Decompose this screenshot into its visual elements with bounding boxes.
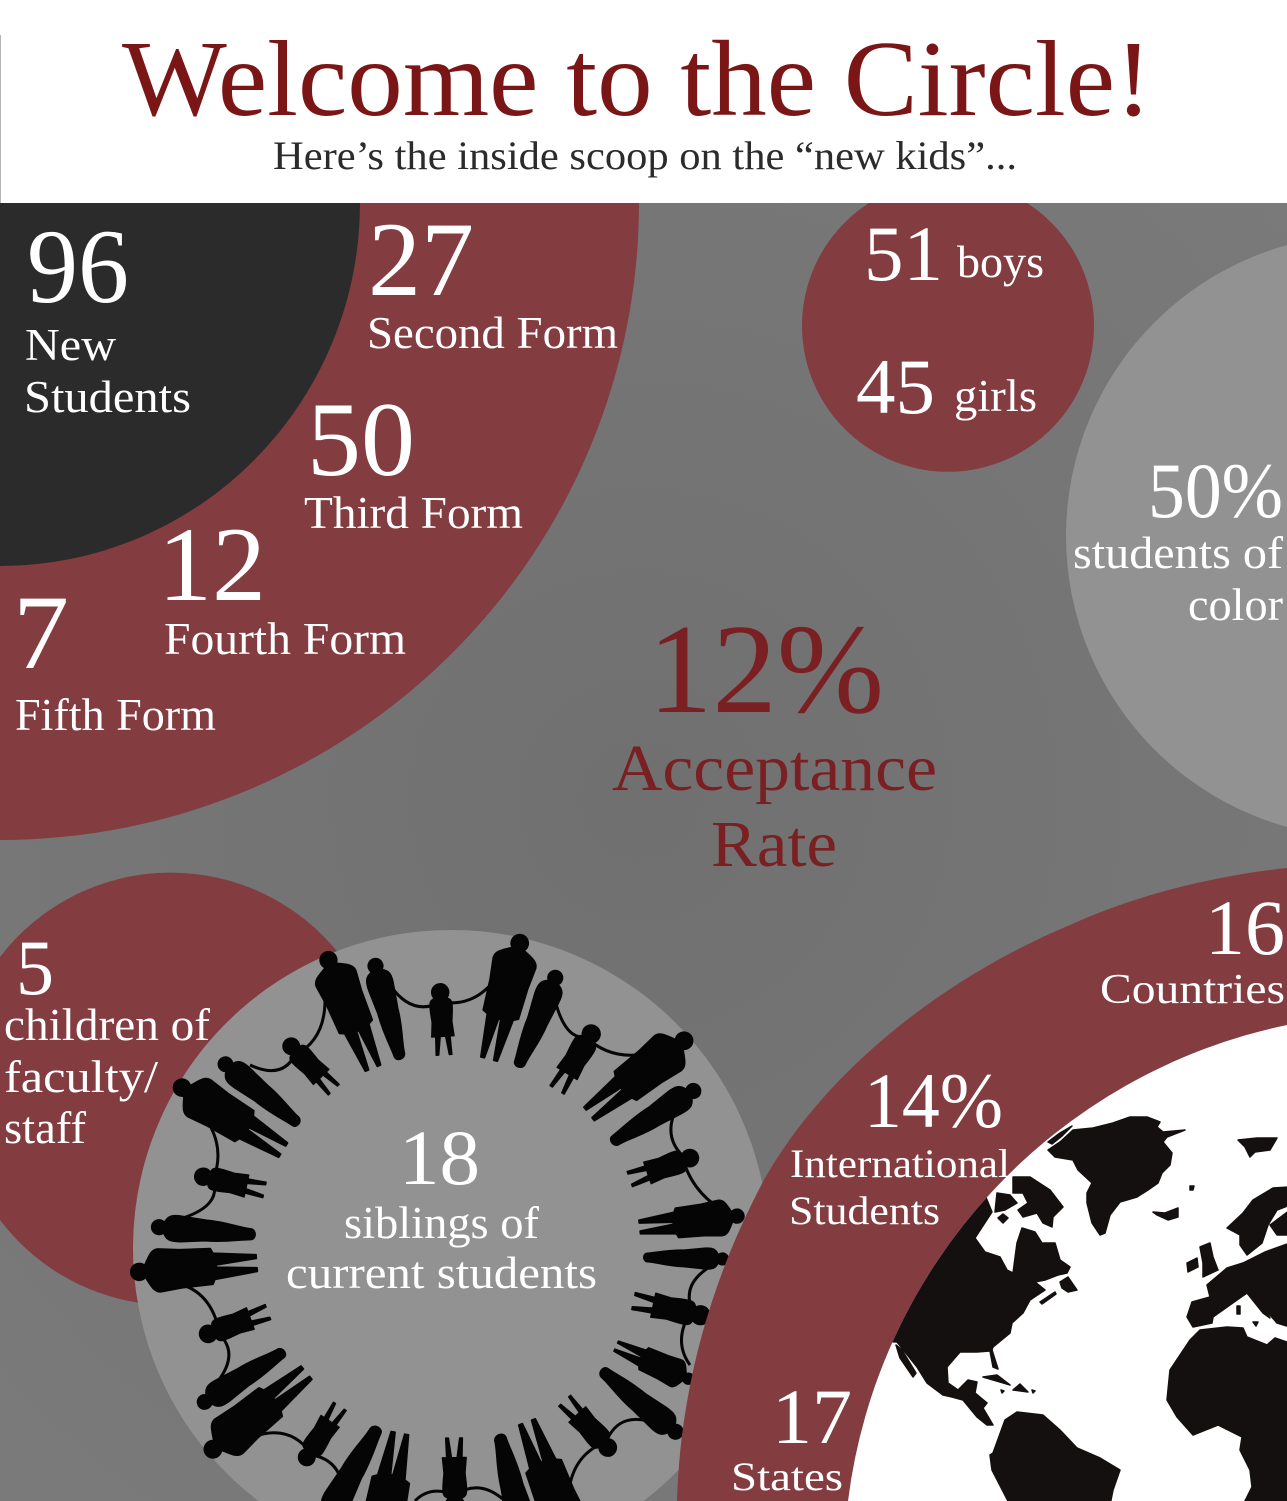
stat: states: 17 [772,1373,852,1460]
stat: boys: 51 [864,210,943,297]
stat: 96 new students: New [25,320,117,370]
stat: girls: 45 [856,343,935,430]
stat: third form: 50 [307,381,415,498]
stat: 5 children of faculty/staff: 5 [16,924,54,1011]
stat: boys [864,210,1044,297]
Europe [1187,1243,1287,1327]
stat: countries [1100,884,1285,1013]
stat: girls: girls [954,371,1037,421]
title: Welcome to the Circle! [122,20,1152,139]
stat: international students: International [790,1141,1010,1186]
stat: countries: 16 [1205,884,1285,971]
stat: second form: Second Form [367,308,618,358]
panel: boys and girls [802,203,1094,472]
stat: international students: 14% [864,1057,1003,1144]
label: students of color: color [1188,580,1283,630]
panel: students of color [1066,234,1287,838]
Scandinavia [1227,1187,1287,1255]
label: students of color: students of [1073,528,1283,578]
label: students of color [1073,528,1283,630]
panel: grade breakdown ring [0,201,639,840]
stat: acceptance rate: Rate [711,808,837,881]
Newfoundland [1040,1277,1077,1304]
stat: countries: Countries [1100,967,1285,1013]
Africa [1167,1327,1287,1501]
stat: girls [856,343,1037,430]
icon: ring of family silhouettes [129,929,746,1501]
stat: international students: Students [789,1188,940,1233]
stat: 18 siblings: current students [286,1248,597,1298]
Canadian Arctic islands [1013,1177,1063,1227]
stat: second form: 27 [368,201,474,318]
panel: new students [0,203,360,566]
subtitle: Here’s the inside scoop on the “new kids”... [273,133,1017,178]
Italy and Mediterranean islands [1237,1293,1270,1326]
stat: 50 percent: 50% [1148,447,1283,534]
stat: 5 children of faculty/staff [4,924,210,1153]
stat: boys: boys [957,237,1044,287]
stat: fourth form: 12 [158,506,266,623]
stat: 18 siblings: siblings of [344,1198,539,1248]
stat: fifth form: 7 [13,574,69,691]
panel: international ring [677,868,1287,1501]
British Isles [1187,1243,1218,1277]
Caribbean islands [983,1375,1035,1393]
stat: fifth form: Fifth Form [15,690,216,740]
icon: world globe [848,1025,1287,1501]
stat: 5 children of faculty/staff: children of [4,1000,210,1050]
Baffin area islands [995,1126,1072,1223]
Iceland [1153,1186,1194,1220]
North and Central America [892,1198,1071,1426]
stat: 96 new students [24,208,191,422]
stat: 5 children of faculty/staff: faculty/ [4,1052,159,1102]
stat: fourth form: Fourth Form [164,614,406,664]
Greenland [1048,1117,1185,1235]
header band [0,0,1287,203]
stat: acceptance rate: 12% [648,598,884,740]
stat: international students [789,1057,1010,1233]
stat: 5 children of faculty/staff: staff [4,1103,86,1153]
Finland [1270,1210,1287,1235]
stat: 96 new students: Students [24,372,191,422]
stat: acceptance rate [612,598,937,881]
stat: second form [367,201,618,358]
panel: siblings circle [129,929,769,1501]
panel: children of faculty [0,873,340,1303]
stat: 96 new students: 96 [27,208,129,325]
South America [990,1412,1120,1501]
stat: states [731,1373,852,1499]
stat: states: States [731,1454,843,1499]
stat: fourth form [158,506,406,664]
stat: third form [304,381,523,538]
stat: third form: Third Form [304,488,523,538]
stat: 18 siblings [286,1114,597,1298]
stat: acceptance rate: Acceptance [612,732,937,805]
Baja California [896,1345,916,1377]
stat: 18 siblings: 18 [399,1114,480,1201]
Svalbard [1238,1138,1277,1157]
stat: fifth form [13,574,216,740]
